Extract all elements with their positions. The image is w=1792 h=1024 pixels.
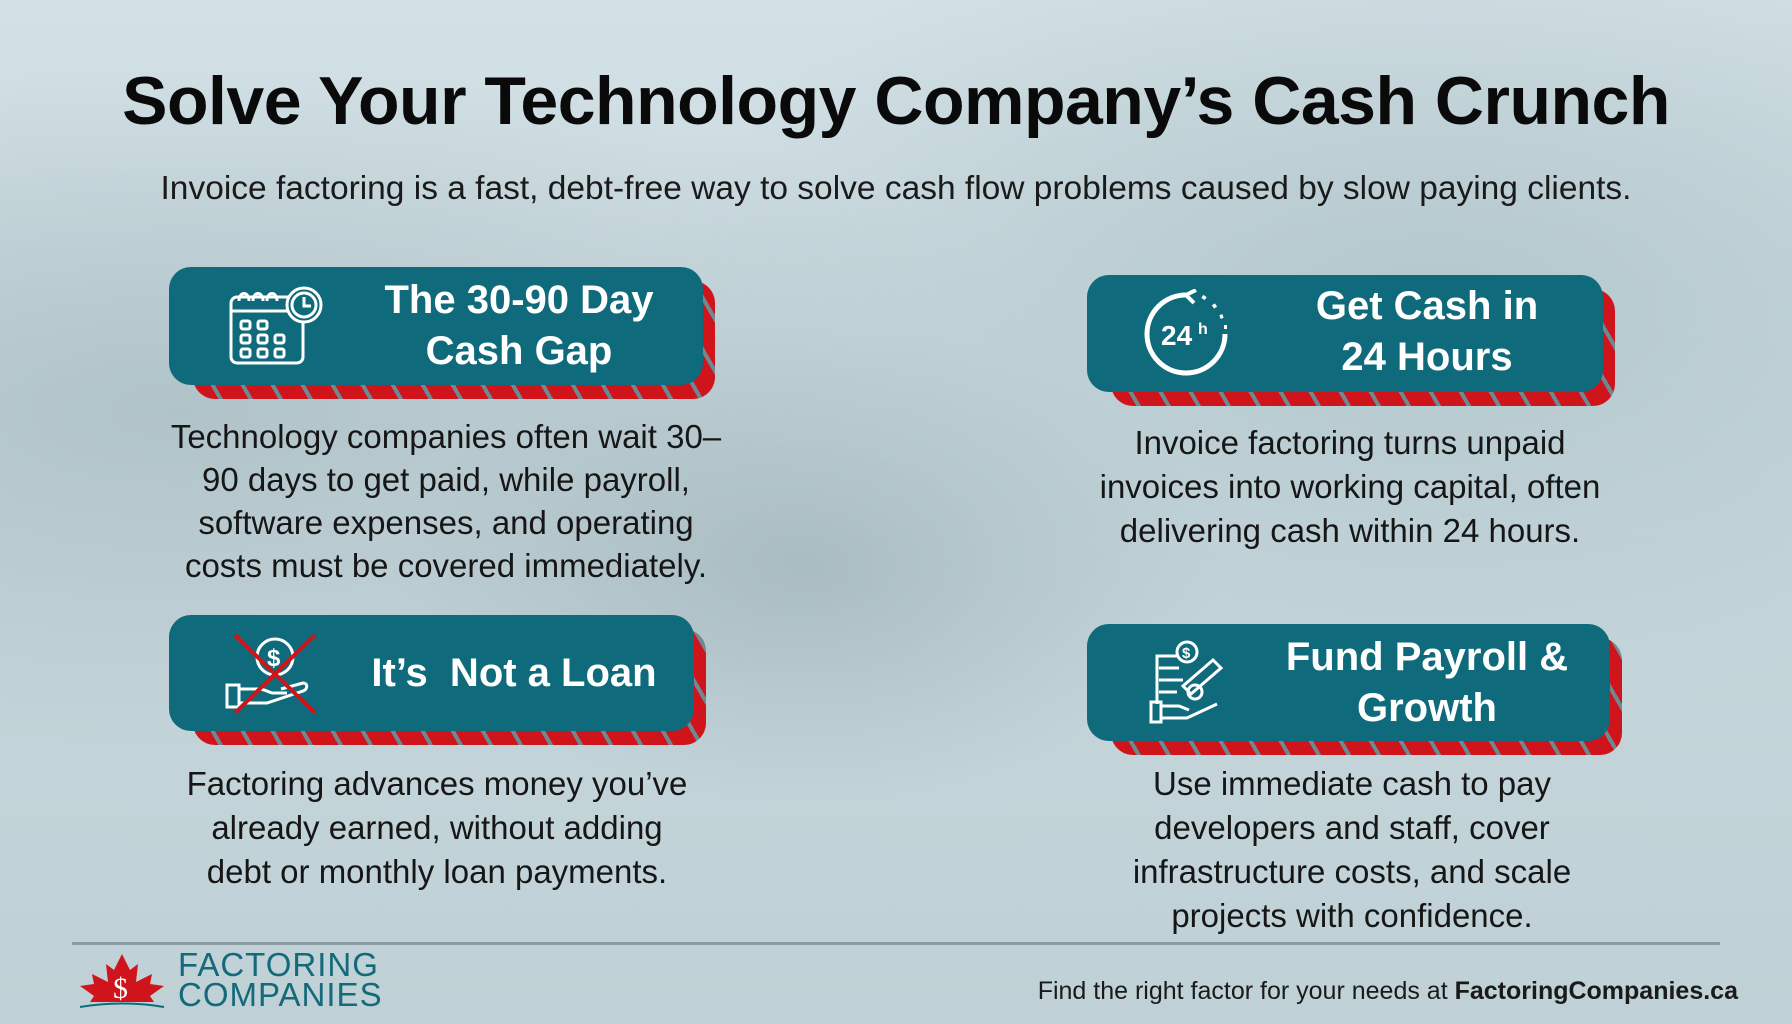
text block: not a loan: already earned, without adding (211, 809, 663, 846)
text block: payroll: Use immediate cash to pay (1153, 765, 1551, 802)
title: Solve Your Technology Company’s Cash Crunch (122, 63, 1670, 139)
icon: invoice money hand: $ (1182, 645, 1191, 662)
heading: Fund Payroll & (1286, 635, 1568, 679)
text block: 24 hours: invoices into working capital, often (1100, 468, 1600, 505)
heading (1316, 284, 1538, 379)
heading: 24 Hours (1341, 335, 1513, 379)
icon: calendar with clock (230, 286, 322, 364)
heading: Get Cash in (1316, 284, 1538, 328)
icon: maple leaf (80, 954, 164, 1008)
text block: payroll: developers and staff, cover (1154, 809, 1550, 846)
text block: payroll (1133, 765, 1571, 934)
heading: It’s Not a Loan (371, 651, 657, 695)
icon: crossed-out money hand: $ (267, 645, 281, 672)
text block: 24 hours (1100, 424, 1600, 549)
icon: crossed-out money hand (226, 634, 316, 714)
logo: factoring companies: COMPANIES (178, 976, 383, 1013)
text block: cash gap: software expenses, and operating (198, 504, 694, 541)
text block: payroll: infrastructure costs, and scale (1133, 853, 1571, 890)
icon: 24h clock: h (1198, 321, 1208, 338)
text block: payroll: projects with confidence. (1171, 897, 1533, 934)
text block: not a loan (187, 765, 687, 890)
subtitle: Invoice factoring is a fast, debt-free way to solve cash flow problems caused by slow paying clients. (160, 170, 1632, 207)
icon: invoice money hand (1150, 640, 1224, 724)
heading (1286, 635, 1568, 730)
logo: factoring companies: FACTORING (178, 946, 379, 983)
heading: Growth (1357, 686, 1497, 730)
panel: not a loan (169, 615, 706, 745)
panel: 30-90 day cash gap (169, 267, 715, 399)
text block: 24 hours: Invoice factoring turns unpaid (1134, 424, 1566, 461)
text block: cash gap: costs must be covered immediately. (185, 547, 707, 584)
footer text: Find the right factor for your needs at FactoringCompanies.ca (1038, 977, 1738, 1005)
text block: 24 hours: delivering cash within 24 hours. (1120, 512, 1580, 549)
text block: not a loan: Factoring advances money you’ve (187, 765, 687, 802)
text block: cash gap (171, 418, 722, 584)
text block: not a loan: debt or monthly loan payments. (207, 853, 667, 890)
heading (384, 278, 654, 373)
text block: cash gap: 90 days to get paid, while payroll, (202, 461, 690, 498)
panel: get cash in 24 hours (1087, 275, 1615, 406)
icon: 24h clock: 24 (1161, 320, 1193, 351)
text block: cash gap: Technology companies often wait 30– (171, 418, 721, 455)
heading: Cash Gap (426, 329, 612, 373)
icon: 24h clock (1144, 289, 1228, 376)
logo: factoring companies (80, 946, 383, 1013)
panel: fund payroll & growth (1087, 624, 1622, 755)
heading: The 30-90 Day (384, 278, 654, 322)
icon: maple leaf: $ (113, 972, 128, 1005)
